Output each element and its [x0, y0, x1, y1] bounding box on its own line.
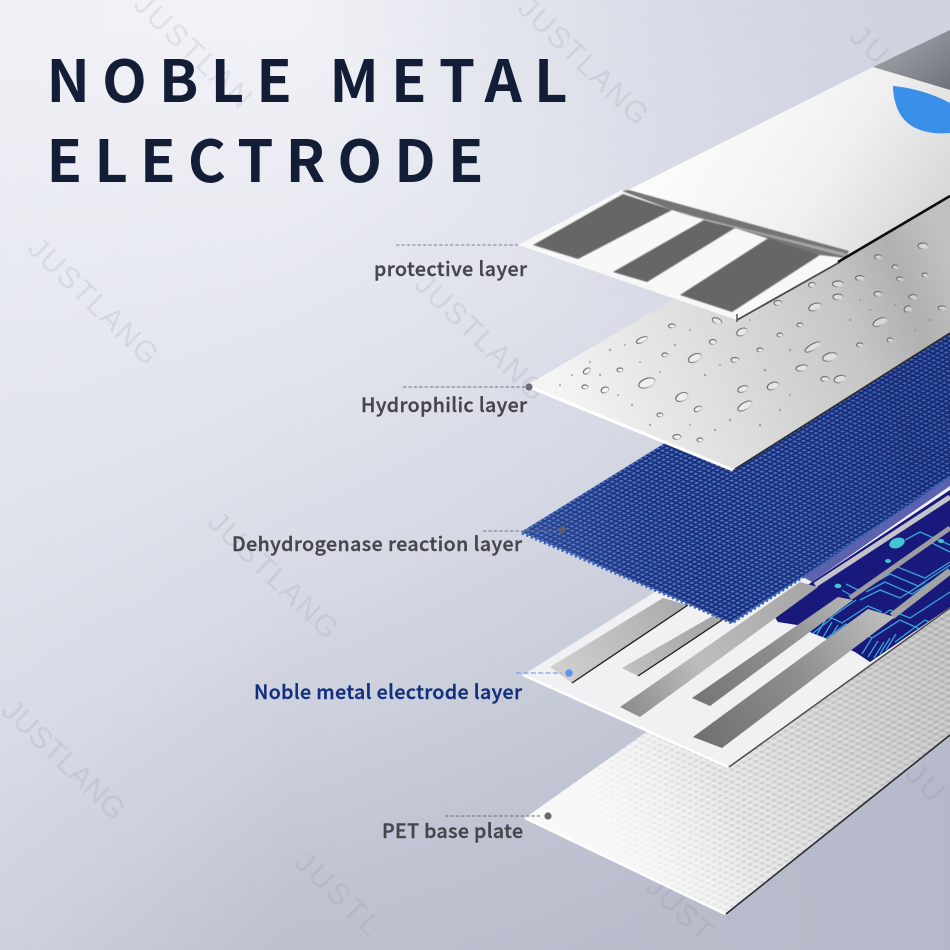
watermarks: JUST	[639, 869, 720, 949]
watermarks: JUSTL	[288, 845, 387, 943]
watermarks: JUSTLANG	[408, 267, 552, 408]
icon: blue water drop	[893, 86, 950, 133]
callout: PET base plate: PET base plate	[382, 815, 523, 844]
title	[46, 35, 568, 199]
title: ELECTRODE	[46, 115, 484, 199]
watermarks: JUS	[843, 19, 912, 87]
callout: noble metal electrode layer: Noble metal electrode layer	[254, 676, 522, 705]
layer: dehydrogenase reaction mesh	[521, 270, 950, 623]
thin strip continuations	[803, 477, 950, 616]
watermarks: JUSTLANG	[201, 505, 345, 646]
circuit panel	[770, 490, 950, 662]
layer: PET base plate	[525, 520, 950, 915]
black edge lines	[737, 196, 950, 322]
watermarks: JU	[899, 757, 950, 809]
electrode strip D	[692, 597, 853, 706]
small droplets	[559, 299, 931, 431]
electrode strip B	[622, 614, 725, 676]
electrode strip E	[693, 609, 895, 748]
electrode strip C	[620, 582, 818, 717]
layer: protective	[518, 30, 950, 322]
electrode plate	[523, 400, 950, 767]
title: NOBLE METAL	[46, 35, 568, 119]
lower white plate	[518, 190, 847, 320]
watermarks: JUSTLANG	[21, 231, 165, 372]
callout: dehydrogenase reaction layer: Dehydrogenase reaction layer	[232, 528, 522, 557]
electrode strip A	[550, 598, 688, 683]
layer: hydrophilic	[527, 130, 950, 470]
callout: noble metal electrode layer	[254, 669, 573, 705]
callout: hydrophilic layer: Hydrophilic layer	[361, 389, 527, 418]
upper white plate	[628, 67, 950, 255]
water droplets	[582, 243, 946, 442]
grey stripes	[533, 190, 849, 312]
layer: noble metal electrode	[522, 478, 950, 768]
callout: protective layer: protective layer	[374, 253, 527, 282]
grey background tab	[873, 30, 950, 90]
